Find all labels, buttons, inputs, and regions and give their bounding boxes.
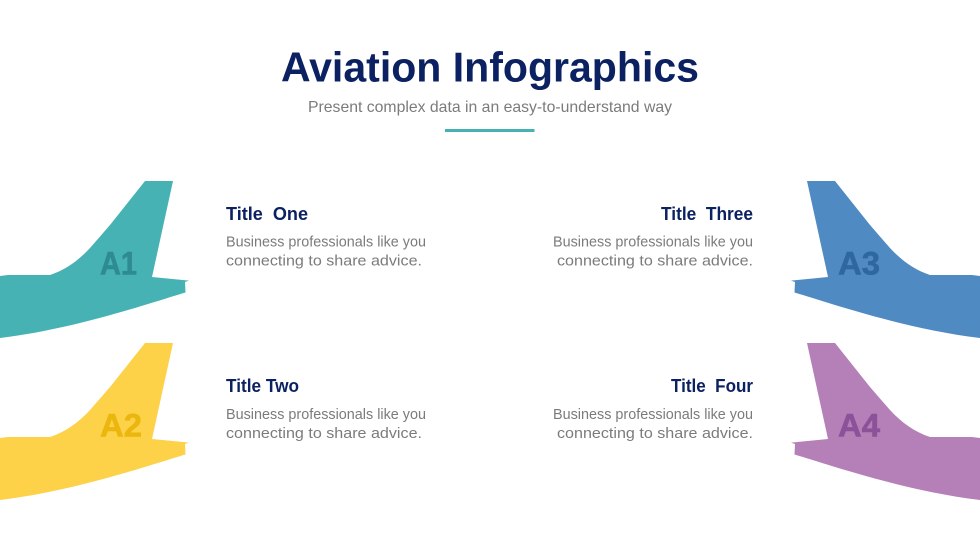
panel: A3 Title Three [553,181,980,338]
icon: teal aircraft tail A1 [0,181,189,338]
text block: Title Three body [553,234,753,270]
text block: Title Four body [553,406,753,442]
title: Aviation Infographics [281,44,699,90]
text block: Title Two body: connecting to share advice. [226,425,422,442]
panel: A4 Title Four [553,343,980,500]
text block: Title Four body: connecting to share advice. [557,425,753,442]
text block: Title Four body: Business professionals like you [553,406,753,423]
panel: A1 Title One [0,181,426,338]
panel: A2 Title Two [0,343,426,500]
text block: Title Two body [226,406,426,442]
icon: blue aircraft tail A3 [791,181,980,338]
text block: Title Three body: Business professionals like you [553,234,753,250]
icon: yellow aircraft tail A2 [0,343,189,500]
icon: teal aircraft tail A1: A1 [100,246,137,282]
heading: Title Two: Title Two [226,376,299,396]
icon: purple aircraft tail A4: A4 [838,408,880,444]
text block: Title One body [226,234,426,270]
icon: yellow aircraft tail A2: A2 [100,408,142,444]
text block: Title One body: connecting to share advice. [226,252,422,270]
title underline [445,129,534,132]
icon: blue aircraft tail A3: A3 [838,246,880,282]
heading: Title Four: Title Four [671,376,753,396]
heading: Title One: Title One [226,204,308,224]
subtitle: Present complex data in an easy-to-understand way [308,99,672,116]
text block: Title One body: Business professionals like you [226,234,426,250]
text block: Title Three body: connecting to share advice. [557,252,753,270]
icon: purple aircraft tail A4 [791,343,980,500]
text block: Title Two body: Business professionals like you [226,406,426,423]
heading: Title Three: Title Three [661,204,753,224]
